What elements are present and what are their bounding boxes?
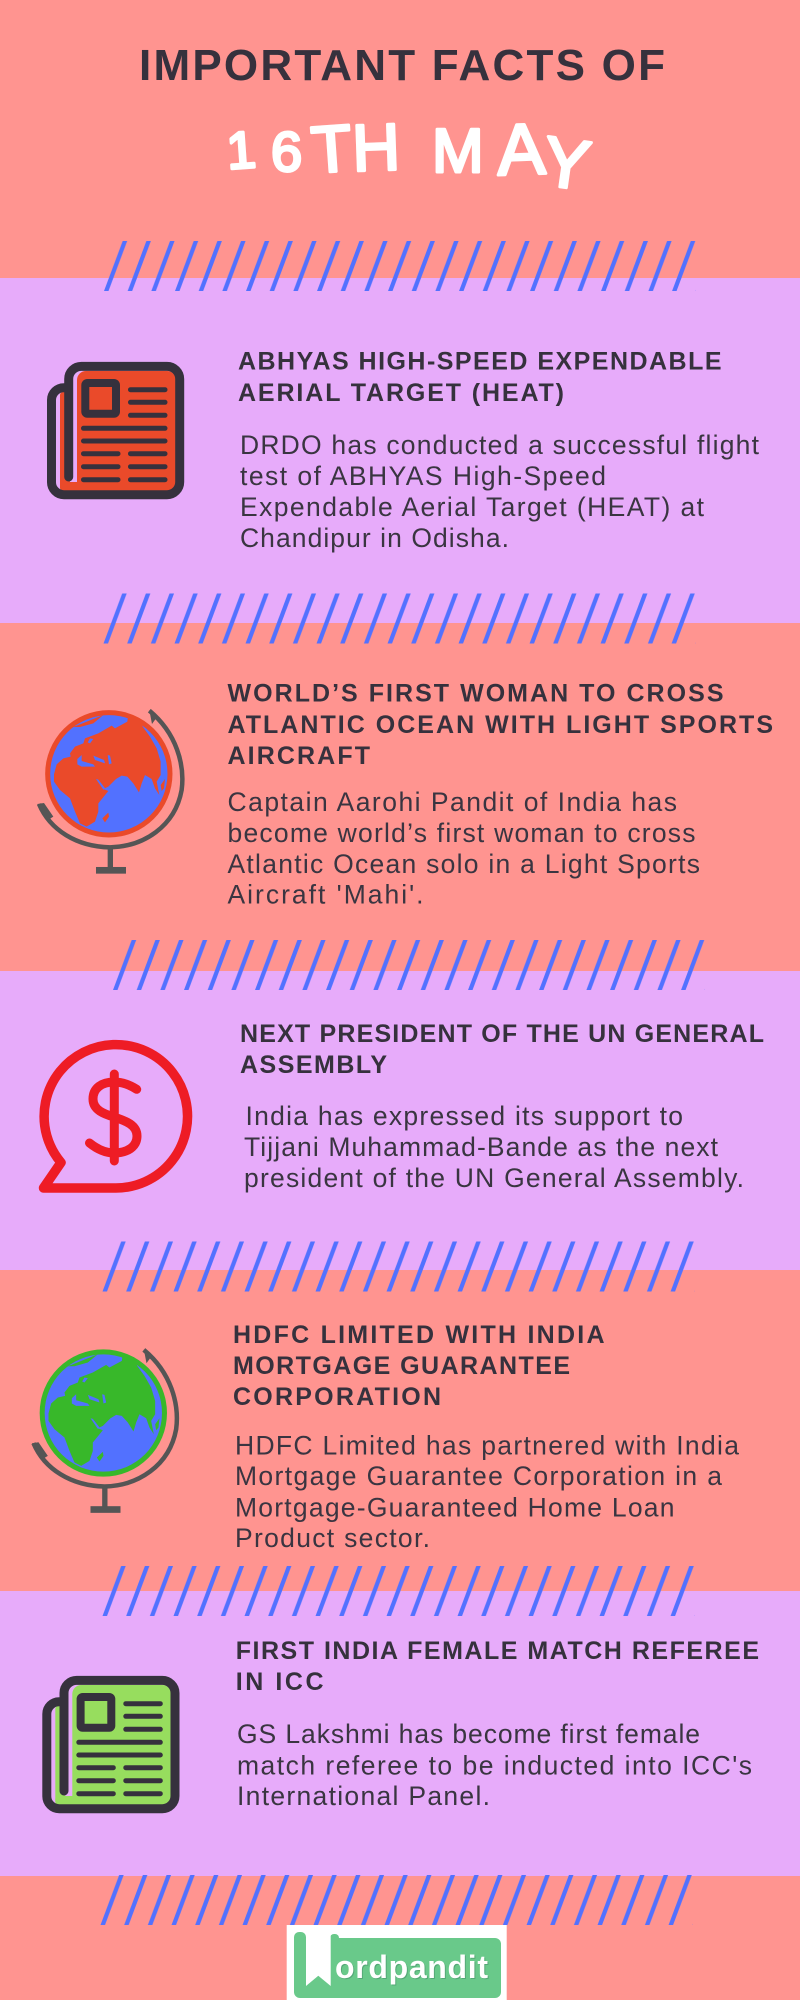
text: first woman: become world’s first woman to cross bbox=[228, 818, 696, 848]
text: first woman bbox=[228, 787, 700, 910]
heading: first woman bbox=[228, 680, 773, 770]
hatch divider 2 bbox=[104, 594, 696, 644]
hatch divider 6 bbox=[100, 1875, 692, 1925]
text: hdfc: Mortgage-Guaranteed Home Loan bbox=[235, 1492, 674, 1522]
panel: hdfc bbox=[0, 1270, 800, 1591]
heading: hdfc: HDFC LIMITED WITH INDIA bbox=[233, 1321, 604, 1349]
title: date in hand lettering: A bbox=[496, 109, 547, 191]
text: first woman: Atlantic Ocean solo in a Light Sports bbox=[228, 849, 700, 879]
panel: un general assembly bbox=[0, 971, 800, 1270]
icon: red globe bbox=[37, 710, 182, 874]
logo: wordpandit: ordpandit bbox=[335, 1949, 488, 1985]
title: date in hand lettering: 1 bbox=[225, 121, 258, 181]
heading: un general assembly: NEXT PRESIDENT OF THE UN GENERAL bbox=[240, 1020, 764, 1048]
panel: title band bbox=[0, 0, 800, 278]
heading: female match referee bbox=[236, 1637, 759, 1696]
heading: abhyas: AERIAL TARGET (HEAT) bbox=[238, 379, 564, 407]
text: female match referee: International Panel. bbox=[237, 1781, 490, 1811]
heading: first woman: ATLANTIC OCEAN WITH LIGHT SPORTS bbox=[228, 711, 773, 739]
logo: wordpandit bbox=[287, 1925, 507, 2000]
text: un general assembly: Tijjani Muhammad-Bande as the next bbox=[244, 1132, 719, 1162]
title: date in hand lettering: Y bbox=[538, 122, 595, 205]
heading: female match referee: FIRST INDIA FEMALE MATCH REFEREE bbox=[236, 1637, 759, 1665]
text: female match referee bbox=[237, 1719, 752, 1811]
title: important facts of: IMPORTANT FACTS OF bbox=[139, 41, 665, 90]
panel: first woman across atlantic bbox=[0, 623, 800, 971]
icon: red newspaper bbox=[51, 366, 180, 495]
text: female match referee: match referee to be inducted into ICC's bbox=[237, 1750, 752, 1780]
text: female match referee: GS Lakshmi has become first female bbox=[237, 1719, 700, 1749]
heading: hdfc bbox=[233, 1321, 604, 1411]
text: hdfc: HDFC Limited has partnered with India bbox=[235, 1430, 739, 1460]
title: date in hand lettering: M bbox=[432, 117, 484, 186]
heading: un general assembly: ASSEMBLY bbox=[240, 1051, 387, 1079]
text: first woman: Captain Aarohi Pandit of India has bbox=[228, 787, 677, 817]
text: un general assembly: president of the UN General Assembly. bbox=[244, 1163, 744, 1193]
text: abhyas: DRDO has conducted a successful flight bbox=[240, 430, 760, 460]
text: un general assembly: India has expressed its support to bbox=[246, 1101, 683, 1131]
text: hdfc: Mortgage Guarantee Corporation in a bbox=[235, 1461, 722, 1491]
panel: female match referee bbox=[0, 1591, 800, 1876]
text: abhyas bbox=[240, 430, 760, 553]
panel: abhyas bbox=[0, 278, 800, 623]
heading: female match referee: IN ICC bbox=[236, 1668, 324, 1696]
hatch divider 5 bbox=[102, 1566, 694, 1616]
heading: abhyas bbox=[238, 348, 722, 407]
text: un general assembly bbox=[244, 1101, 744, 1193]
hatch divider 3 bbox=[113, 940, 705, 990]
text: abhyas: Chandipur in Odisha. bbox=[240, 523, 509, 553]
heading: un general assembly bbox=[240, 1020, 764, 1079]
icon: green globe bbox=[32, 1349, 177, 1513]
text: first woman: Aircraft 'Mahi'. bbox=[228, 880, 424, 910]
panel: footer band bbox=[0, 1876, 800, 2000]
text: abhyas: Expendable Aerial Target (HEAT) at bbox=[240, 492, 705, 522]
heading: hdfc: MORTGAGE GUARANTEE bbox=[233, 1352, 570, 1380]
text: abhyas: test of ABHYAS High-Speed bbox=[240, 461, 606, 491]
title: date in hand lettering: H bbox=[351, 109, 401, 185]
heading: first woman: AIRCRAFT bbox=[228, 742, 370, 770]
icon: dollar speech bubble bbox=[44, 1045, 188, 1188]
title: date in hand lettering: T bbox=[309, 110, 354, 187]
text: hdfc: Product sector. bbox=[235, 1523, 430, 1553]
hatch divider 1 bbox=[104, 241, 696, 291]
hatch divider 4 bbox=[102, 1242, 694, 1292]
heading: first woman: WORLD’S FIRST WOMAN TO CROSS bbox=[228, 680, 724, 708]
text: hdfc bbox=[235, 1430, 739, 1553]
icon: green newspaper bbox=[47, 1680, 175, 1809]
title: date in hand lettering: 6 bbox=[271, 120, 302, 183]
heading: hdfc: CORPORATION bbox=[233, 1383, 441, 1411]
heading: abhyas: ABHYAS HIGH-SPEED EXPENDABLE bbox=[238, 348, 722, 376]
